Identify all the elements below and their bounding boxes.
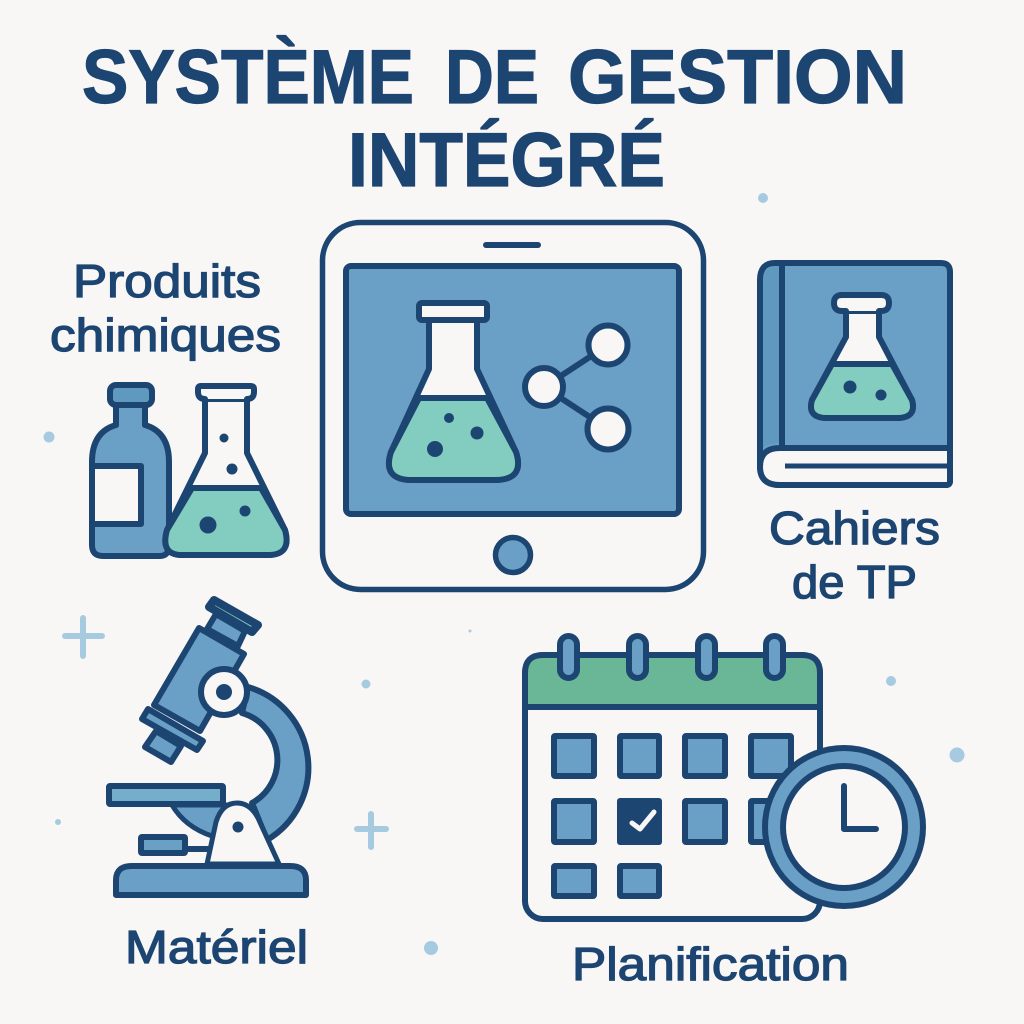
title: SYSTÈME xyxy=(82,35,414,120)
title xyxy=(82,35,907,203)
microscope focus wheel xyxy=(201,669,247,715)
tablet flask icon xyxy=(389,303,518,480)
microscope base xyxy=(116,866,306,895)
label: produits chimiques: Produits xyxy=(73,255,261,307)
icon: bottle xyxy=(92,385,169,556)
title: GESTION xyxy=(568,35,907,120)
tablet home button xyxy=(496,538,530,572)
label: produits chimiques: chimiques xyxy=(50,309,281,361)
icon: calendar with clock xyxy=(525,636,923,919)
calendar day grid xyxy=(554,736,791,896)
book pages xyxy=(760,448,950,485)
microscope eyepiece xyxy=(207,614,245,646)
tablet screen xyxy=(346,266,679,514)
icon: flask with liquid xyxy=(165,386,287,555)
microscope pillar xyxy=(207,803,279,864)
label: cahiers de TP: de TP xyxy=(792,556,917,608)
checked day xyxy=(617,798,662,845)
title: INTÉGRÉ xyxy=(348,118,665,203)
label: cahiers de TP: Cahiers xyxy=(769,502,940,554)
microscope tube xyxy=(154,628,244,731)
central tablet xyxy=(322,222,704,590)
icon: lab book xyxy=(760,263,950,485)
microscope stage xyxy=(109,786,223,804)
label: produits chimiques xyxy=(50,255,281,361)
decorative dots and plus signs xyxy=(44,193,964,955)
label: cahiers de TP xyxy=(769,502,940,608)
tablet speaker xyxy=(486,242,538,248)
microscope slide knob xyxy=(187,846,208,852)
clock xyxy=(765,748,923,906)
tablet share icon xyxy=(525,326,628,450)
title: DE xyxy=(445,35,539,120)
label: planification: Planification xyxy=(572,938,849,990)
calendar header xyxy=(525,655,820,707)
calendar rings xyxy=(560,636,783,678)
microscope arm xyxy=(242,687,308,840)
book flask icon xyxy=(811,295,913,418)
icon: microscope xyxy=(109,600,308,895)
label: matériel: Matériel xyxy=(125,921,308,973)
